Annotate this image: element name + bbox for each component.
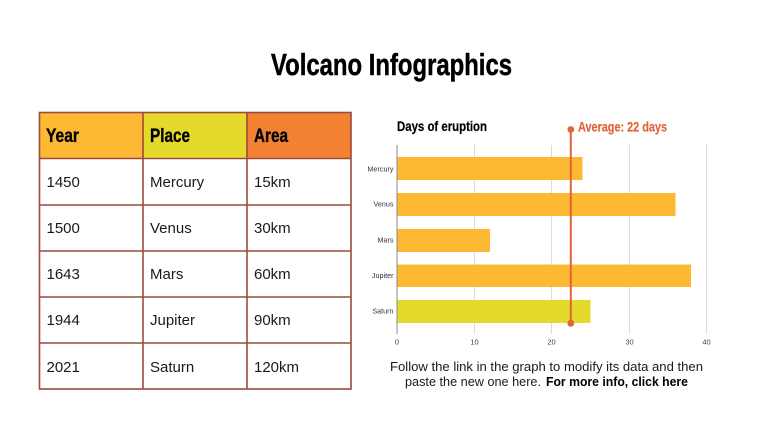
bar: Jupiter — [372, 264, 691, 287]
table row: 1944 — [46, 312, 291, 329]
table row: 1450: Mercury — [150, 174, 205, 191]
table header: year: Year — [46, 126, 79, 147]
table row: 1643: Mars — [150, 266, 183, 283]
bar chart: days of eruption — [368, 145, 711, 346]
table row: 2021: 2021 — [46, 359, 80, 376]
bar: Mercury: Mercury — [368, 164, 394, 174]
bar: Saturn: Saturn — [372, 306, 394, 316]
bar: Saturn — [372, 300, 590, 323]
table header: place — [144, 112, 248, 158]
table header: area: Area — [254, 126, 288, 147]
chart caption: paste the new one here. — [405, 374, 541, 389]
chart heading: Days of eruption — [397, 119, 487, 134]
table row: 1450: 15km — [254, 174, 291, 191]
table row: 1643 — [46, 266, 291, 283]
table row: 1500: Venus — [150, 220, 192, 237]
x axis labels: 30 — [625, 338, 634, 346]
table row: 1944: 1944 — [46, 312, 80, 329]
x axis labels: 20 — [547, 338, 556, 346]
table grid — [40, 112, 351, 389]
title: Volcano Infographics — [271, 47, 512, 82]
bar: Venus — [374, 193, 676, 216]
bar: Mars — [378, 229, 490, 252]
table row: 1450: 1450 — [46, 174, 80, 191]
table header: year — [40, 112, 144, 158]
table row: 1643: 60km — [254, 266, 291, 283]
average label: Average: 22 days — [578, 118, 667, 134]
table row: 1944: Jupiter — [150, 312, 195, 329]
bar: Mercury — [368, 157, 582, 180]
chart caption: For more info, click here — [546, 374, 688, 389]
table row: 1944: 90km — [254, 312, 291, 329]
chart caption: Follow the link in the graph to modify its data and then — [390, 359, 703, 374]
bar: Mars: Mars — [378, 236, 394, 244]
table row: 1500: 1500 — [46, 220, 80, 237]
table row: 1643: 1643 — [46, 266, 80, 283]
table row: 2021: 120km — [254, 359, 299, 376]
bar: Venus: Venus — [374, 200, 394, 208]
panel: data table — [40, 112, 352, 389]
x axis labels: 0 — [395, 338, 399, 346]
table row: 1500 — [46, 220, 291, 237]
table row: 2021: Saturn — [150, 359, 194, 376]
bar: Jupiter: Jupiter — [372, 271, 394, 280]
x axis labels — [395, 338, 711, 346]
table header: area — [248, 112, 352, 158]
table row: 1500: 30km — [254, 220, 291, 237]
table header: place: Place — [150, 126, 190, 147]
average marker line — [567, 126, 574, 327]
table row: 1450 — [46, 174, 291, 191]
x axis labels: 40 — [702, 338, 711, 346]
table row: 2021 — [46, 359, 299, 376]
x axis labels: 10 — [470, 338, 479, 346]
chart caption — [390, 359, 703, 389]
